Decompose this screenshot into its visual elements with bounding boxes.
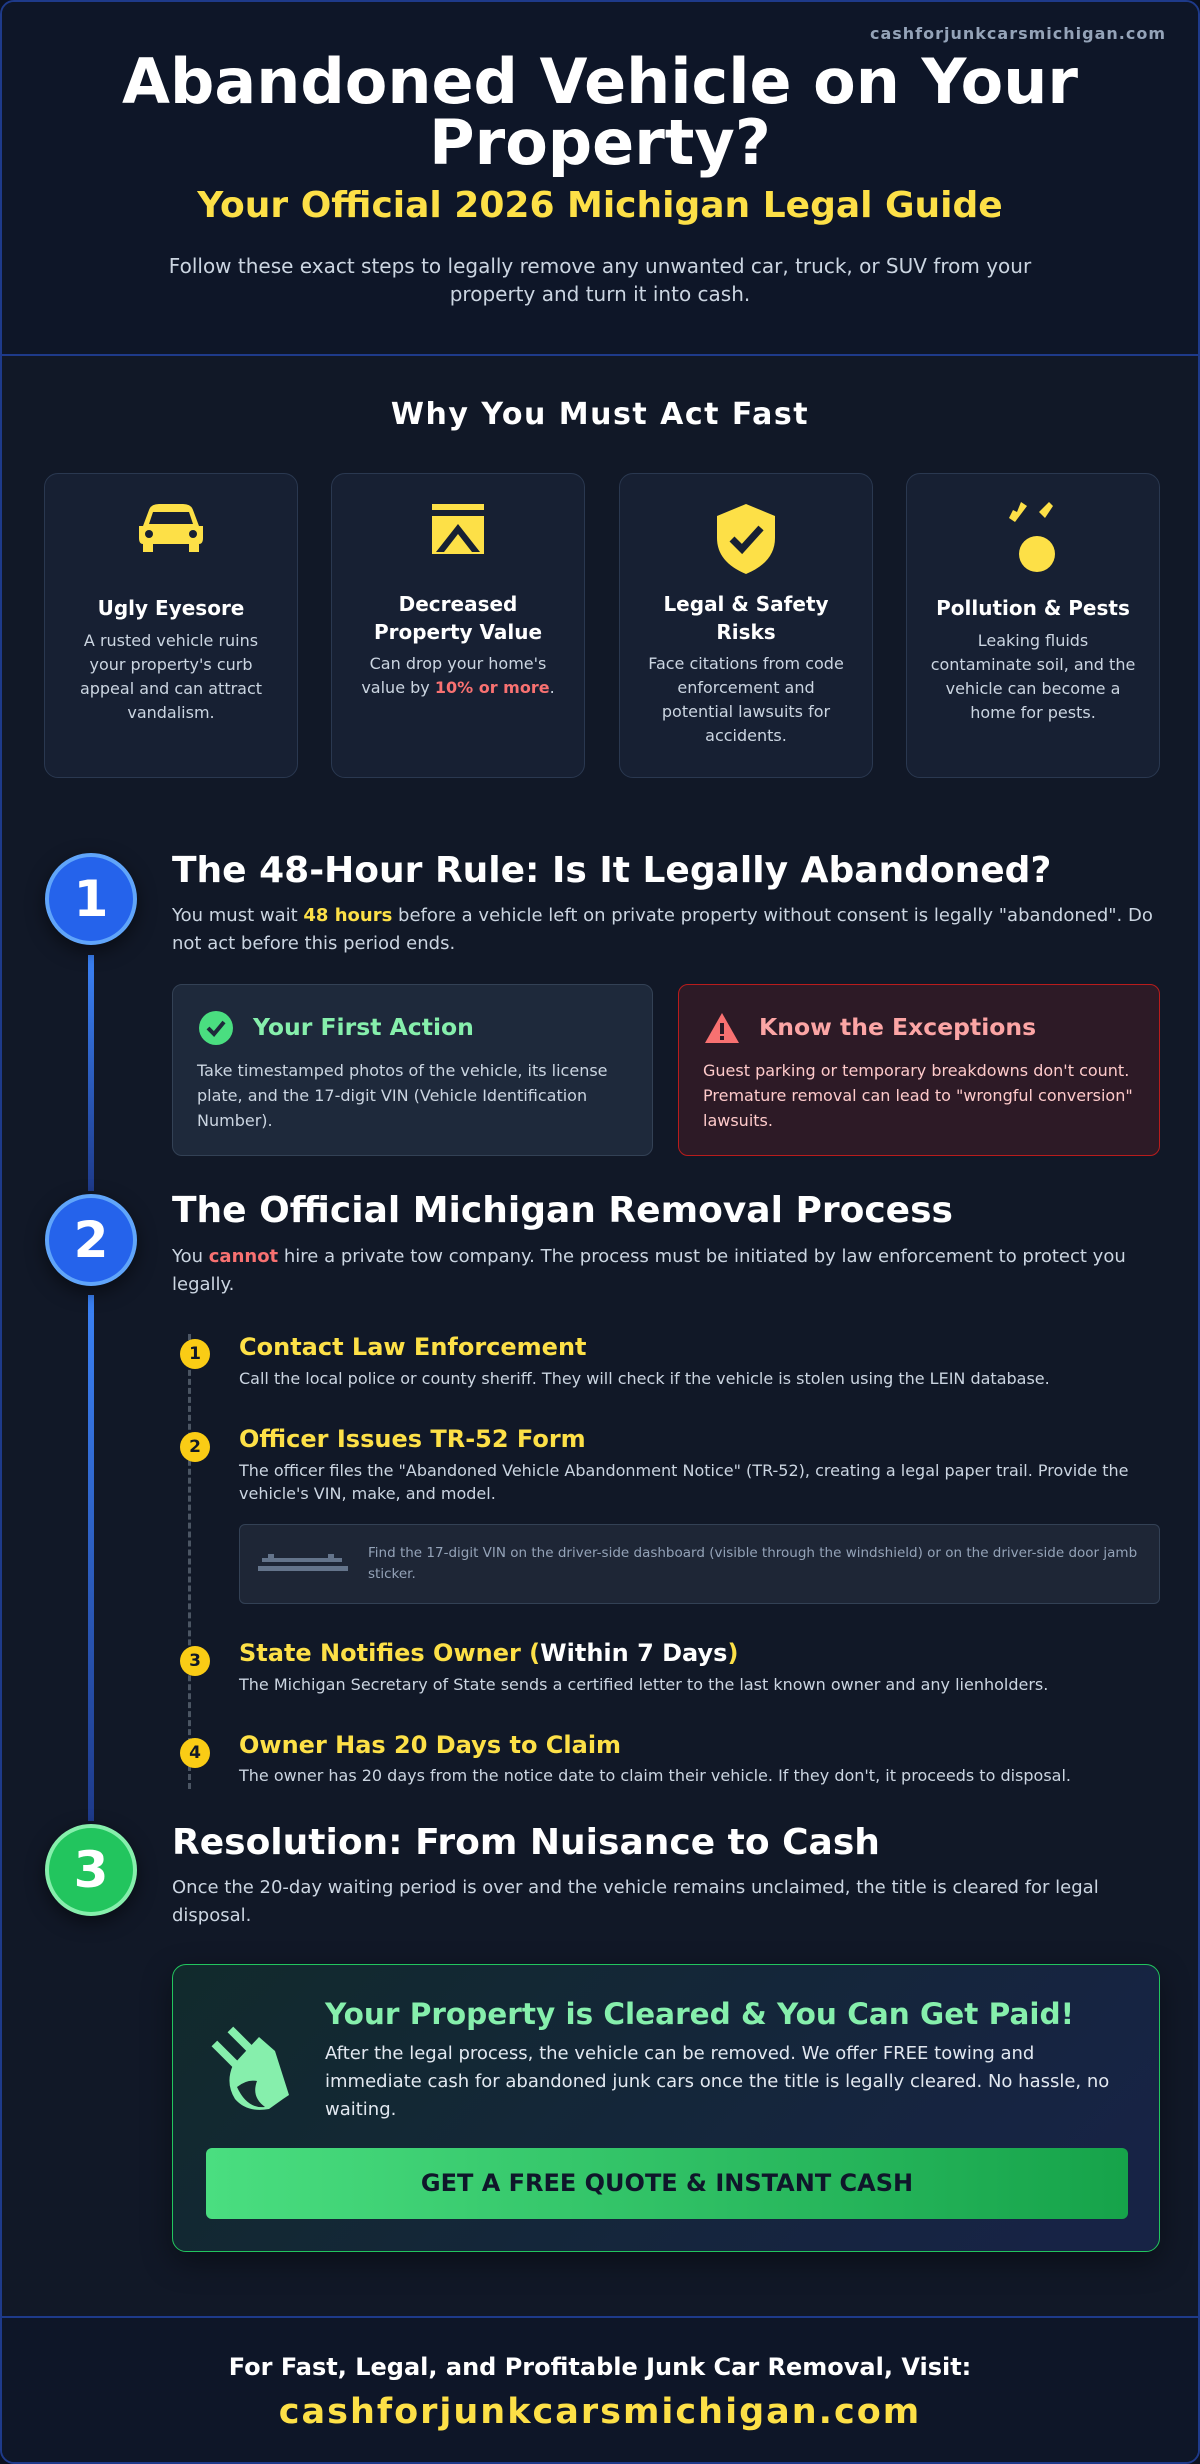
- card: pollution: Leaking fluids: [978, 631, 1088, 650]
- card: legal risks: [619, 473, 873, 778]
- timeline line 2: [88, 1295, 94, 1821]
- card: pollution: Pollution & Pests: [936, 596, 1130, 620]
- substep 1: 1: [189, 1344, 201, 1364]
- icon: drops: [1009, 502, 1055, 572]
- step 1 text: You must wait 48 hours before a vehicle left on private property without consent is legally "abandoned". Do: [172, 905, 1153, 926]
- substep 1: Contact Law Enforcement: [239, 1333, 587, 1361]
- icon: warning: [705, 1013, 739, 1043]
- step 2 circle: [45, 1194, 137, 1286]
- substep 1: Call the local police or county sheriff. They will check if the vehicle is stolen using the LEIN database.: [239, 1369, 1050, 1388]
- card: decreased value: Can drop your home's: [370, 654, 546, 673]
- substep 2: [180, 1425, 1160, 1604]
- timeline line 1: [88, 955, 94, 1191]
- substep 2: The officer files the "Abandoned Vehicle Abandonment Notice" (TR-52), creating a legal paper trail. Provide the: [239, 1461, 1129, 1480]
- step 3 circle: 3: [74, 1841, 108, 1899]
- box: exceptions: Premature removal can lead to "wrongful conversion": [703, 1086, 1133, 1105]
- substep 4: [180, 1731, 1071, 1785]
- box: first action: Take timestamped photos of the vehicle, its license: [197, 1061, 608, 1080]
- card: pollution: vehicle can become a: [946, 679, 1120, 698]
- card: ugly eyesore: Ugly Eyesore: [98, 596, 244, 620]
- card: legal risks: Risks: [716, 620, 776, 644]
- site url top: cashforjunkcarsmichigan.com: [870, 24, 1166, 43]
- card: decreased value: [331, 473, 585, 778]
- card: decreased value: Property Value: [374, 620, 542, 644]
- substep 4: Owner Has 20 Days to Claim: [239, 1731, 621, 1759]
- box: exceptions: lawsuits.: [703, 1111, 773, 1130]
- box: first action: Your First Action: [253, 1013, 474, 1041]
- CTA panel: After the legal process, the vehicle can be removed. We offer FREE towing and: [325, 2043, 1034, 2064]
- step 2 circle: 2: [74, 1211, 108, 1269]
- step 2 text: legally.: [172, 1274, 234, 1295]
- substep 2: Officer Issues TR-52 Form: [239, 1425, 586, 1453]
- footer url: cashforjunkcarsmichigan.com: [279, 2392, 921, 2432]
- substep 4: The owner has 20 days from the notice date to claim their vehicle. If they don't, it proceeds to disposal.: [239, 1766, 1071, 1785]
- step 1 text: not act before this period ends.: [172, 933, 455, 954]
- card: legal risks: Legal & Safety: [663, 592, 829, 616]
- card: ugly eyesore: vandalism.: [127, 703, 215, 722]
- CTA panel: [172, 1964, 1160, 2252]
- card: legal risks: Face citations from code: [648, 654, 844, 673]
- icon: value down: [432, 504, 484, 554]
- step 2 heading: The Official Michigan Removal Process: [172, 1190, 953, 1231]
- card: ugly eyesore: your property's curb: [89, 655, 253, 674]
- substep 3: The Michigan Secretary of State sends a certified letter to the last known owner and any lienholders.: [239, 1675, 1048, 1694]
- icon: shield: [717, 504, 775, 574]
- title: Abandoned Vehicle on Your: [122, 45, 1078, 118]
- heading: why act fast: Why You Must Act Fast: [391, 397, 809, 432]
- CTA panel: waiting.: [325, 2099, 396, 2120]
- icon: plug: [212, 2026, 289, 2110]
- step 2 text: You cannot hire a private tow company. The process must be initiated by law enforcement to protect you: [172, 1246, 1126, 1267]
- step 1 heading: The 48-Hour Rule: Is It Legally Abandoned?: [172, 850, 1051, 891]
- substep 1: [180, 1333, 1050, 1388]
- step 3 text: [172, 1877, 1099, 1926]
- box: first action: plate, and the 17-digit VIN (Vehicle Identification: [197, 1086, 587, 1105]
- step 3 text: disposal.: [172, 1905, 251, 1926]
- card: pollution: [906, 473, 1160, 778]
- substep 2: vehicle's VIN, make, and model.: [239, 1484, 496, 1503]
- title: Property?: [429, 106, 771, 179]
- CTA panel: Your Property is Cleared & You Can Get Paid!: [325, 1997, 1074, 2031]
- box: exceptions: Know the Exceptions: [759, 1013, 1036, 1041]
- icon: vin plate: [258, 1554, 348, 1571]
- card: pollution: contaminate soil, and the: [931, 655, 1135, 674]
- substep 3: State Notifies Owner (Within 7 Days): [239, 1639, 738, 1667]
- icon: car: [139, 504, 203, 552]
- substep 3: 3: [189, 1651, 201, 1671]
- intro paragraph: [169, 254, 1032, 306]
- card: ugly eyesore: appeal and can attract: [80, 679, 262, 698]
- CTA panel: immediate cash for abandoned junk cars once the title is legally cleared. No hassle, no: [325, 2071, 1109, 2092]
- box: exceptions: [678, 984, 1160, 1156]
- step 2 text: [172, 1246, 1126, 1295]
- step 1 text: [172, 905, 1153, 954]
- card: decreased value: Decreased: [399, 592, 517, 616]
- VIN tip box: [239, 1524, 1160, 1604]
- step 3 heading: Resolution: From Nuisance to Cash: [172, 1822, 880, 1863]
- card: ugly eyesore: [44, 473, 298, 778]
- card: legal risks: potential lawsuits for: [662, 702, 830, 721]
- box: exceptions: Guest parking or temporary breakdowns don't count.: [703, 1061, 1129, 1080]
- card: decreased value: value by 10% or more.: [361, 678, 555, 697]
- CTA button: GET A FREE QUOTE & INSTANT CASH: [421, 2169, 913, 2197]
- subtitle: Your Official 2026 Michigan Legal Guide: [197, 185, 1003, 226]
- box: first action: Number).: [197, 1111, 273, 1130]
- substep 2: 2: [189, 1437, 201, 1457]
- footer: [2, 2316, 1198, 2464]
- VIN tip box: Find the 17-digit VIN on the driver-side dashboard (visible through the windshield) or on the driver-side door jamb sticker.: [368, 1545, 1137, 1582]
- card: legal risks: accidents.: [705, 726, 787, 745]
- card: legal risks: enforcement and: [677, 678, 815, 697]
- icon: check: [199, 1011, 233, 1045]
- dashed substep line: [188, 1334, 191, 1789]
- step 1 circle: 1: [74, 870, 108, 928]
- box: first action: [172, 984, 653, 1156]
- substep 3: [180, 1639, 1048, 1694]
- header section: [2, 2, 1198, 356]
- step 1 circle: [45, 853, 137, 945]
- intro paragraph: Follow these exact steps to legally remove any unwanted car, truck, or SUV from your: [169, 254, 1031, 278]
- substep 4: 4: [189, 1743, 201, 1763]
- CTA button: [206, 2148, 1128, 2219]
- card: ugly eyesore: A rusted vehicle ruins: [84, 631, 258, 650]
- footer text: For Fast, Legal, and Profitable Junk Car Removal, Visit:: [229, 2353, 971, 2381]
- step 3 circle: [45, 1824, 137, 1916]
- intro paragraph: property and turn it into cash.: [450, 282, 750, 306]
- title: [122, 45, 1078, 179]
- step 3 text: Once the 20-day waiting period is over and the vehicle remains unclaimed, the title is cleared for legal: [172, 1877, 1099, 1898]
- card: pollution: home for pests.: [970, 703, 1096, 722]
